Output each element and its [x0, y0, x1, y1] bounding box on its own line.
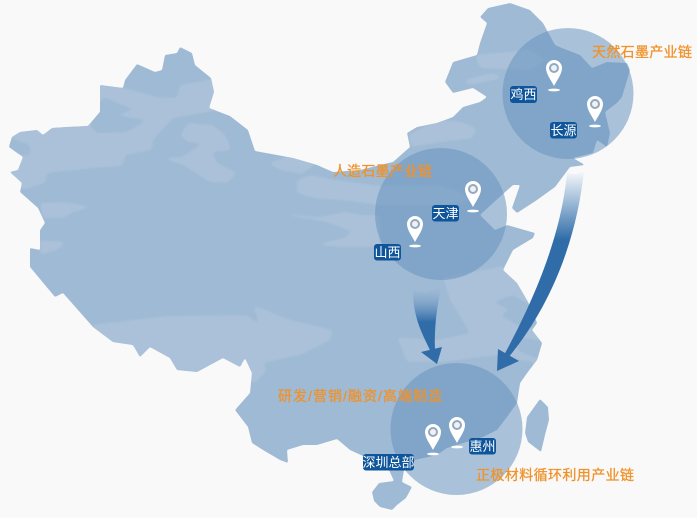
label: Shanxi: 山西 [374, 245, 401, 260]
caption: R&D and manufacturing: 研发/营销/融资/高端制造 [278, 388, 442, 404]
arrow: northeast to south [497, 170, 584, 371]
pin: Huizhou [449, 417, 465, 448]
pin: Shanxi [407, 216, 423, 247]
pin: Tianjin [465, 181, 481, 212]
caption: synthetic graphite chain: 人造石墨产业链 [333, 163, 432, 179]
label: Huizhou: 惠州 [469, 439, 496, 454]
label: Tianjin: 天津 [432, 206, 459, 221]
highlight circle: northeast [502, 28, 634, 159]
label: Changyuan: 长源 [550, 123, 577, 138]
caption: cathode recycling chain: 正极材料循环利用产业链 [476, 467, 634, 483]
caption: natural graphite chain: 天然石墨产业链 [592, 44, 692, 60]
highlight circle: south [390, 363, 522, 495]
terrain shading [0, 50, 550, 392]
highlight circle: north [375, 148, 507, 280]
arrow: north to south [413, 283, 442, 364]
label: Jixi: 鸡西 [510, 87, 537, 102]
island: Taiwan [525, 399, 549, 452]
pin: Changyuan [587, 96, 603, 127]
pin: Shenzhen [425, 424, 441, 455]
pin: Jixi [546, 60, 562, 91]
label: Shenzhen headquarters: 深圳总部 [362, 455, 415, 470]
